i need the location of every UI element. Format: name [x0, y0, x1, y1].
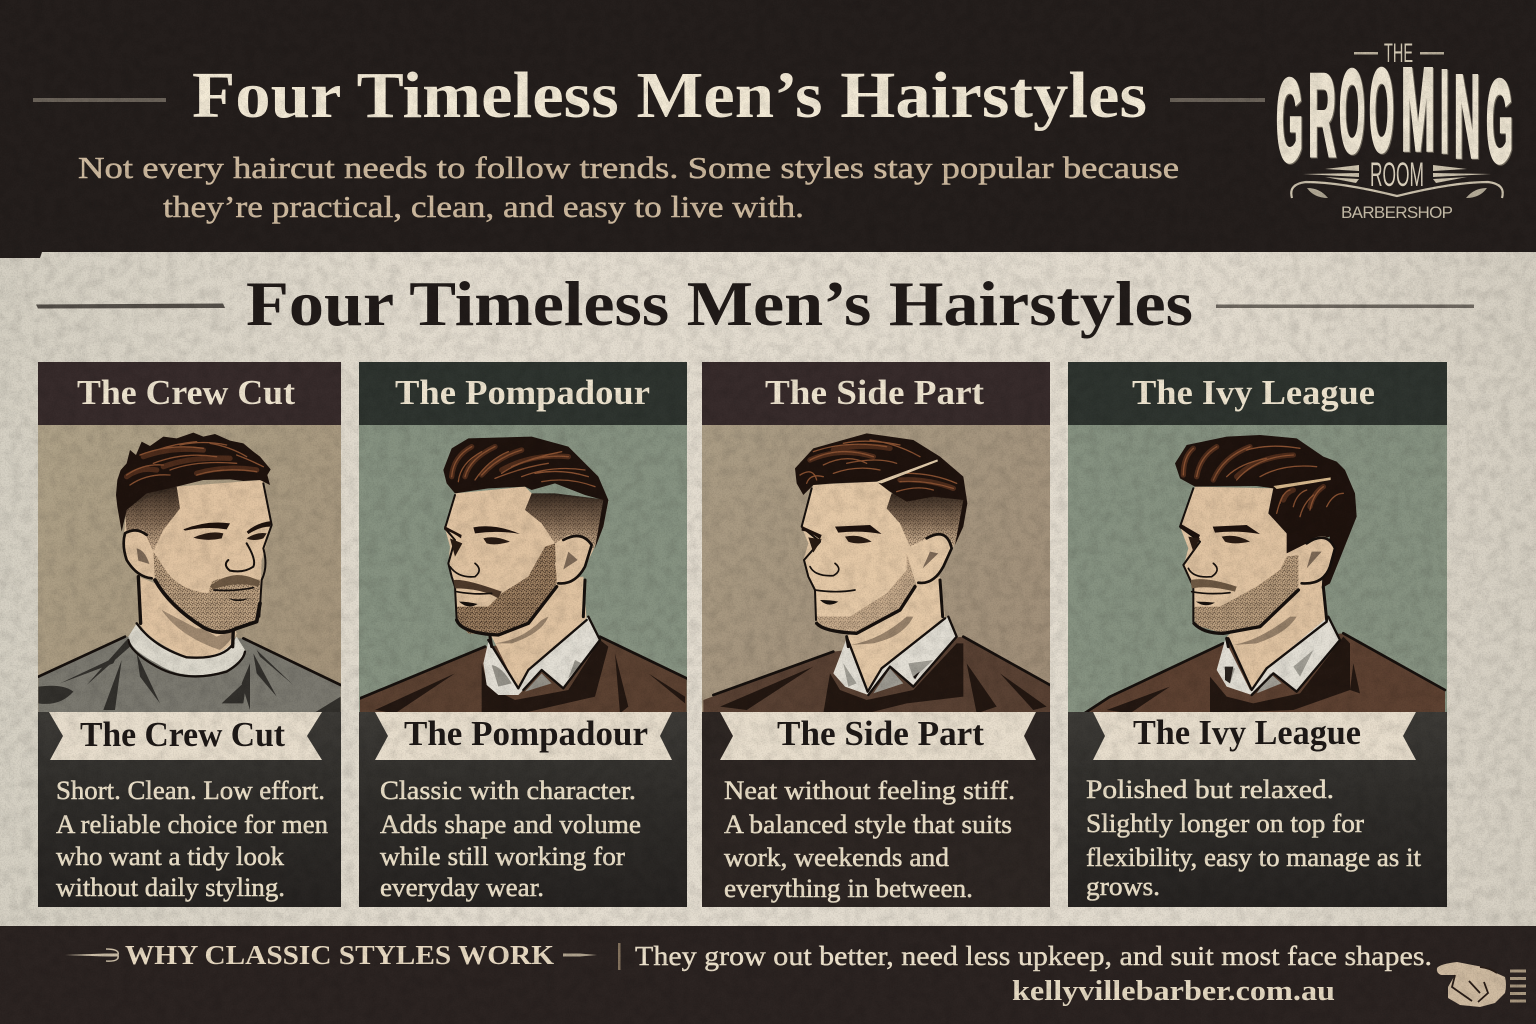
panel 3 description [724, 776, 1015, 903]
panel 4 name ribbon: The Ivy League [1133, 713, 1361, 752]
intro text: Not every haircut needs to follow trends. Some styles stay popular because [78, 150, 1179, 185]
logo: The Grooming Room Barbershop: THE [1384, 38, 1413, 68]
panel 3 name ribbon [720, 712, 1036, 760]
logo wordmark: M [1401, 44, 1435, 176]
panel 3 header [702, 362, 1050, 425]
panel 1 name ribbon: The Crew Cut [80, 715, 285, 754]
main title: Four Timeless Men’s Hairstyles [192, 59, 1147, 132]
panel 4 header: The Ivy League [1132, 373, 1375, 412]
logo wordmark: I [1440, 46, 1449, 178]
panel 3 description: Neat without feeling stiff. [724, 776, 1015, 805]
portrait: ivy league [1077, 435, 1445, 720]
panel 3 description: everything in between. [724, 874, 973, 903]
panel 1 description: without daily styling. [56, 873, 285, 902]
panel 1 header [38, 362, 341, 425]
panel 1 description: Short. Clean. Low effort. [56, 776, 325, 805]
panel 4 description: Polished but relaxed. [1086, 775, 1334, 804]
footer heading: WHY CLASSIC STYLES WORK [125, 940, 554, 970]
panel 1 name ribbon [49, 712, 322, 760]
panel 2 name ribbon: The Pompadour [404, 714, 648, 753]
portrait: side part [703, 433, 1050, 720]
panel 2 description: Adds shape and volume [380, 810, 641, 839]
logo wordmark [1276, 44, 1513, 188]
panel 3 description: A balanced style that suits [724, 810, 1012, 839]
logo wordmark: O [1369, 45, 1394, 177]
panel 4 name ribbon [1093, 712, 1416, 760]
logo: The Grooming Room Barbershop: ROOM [1370, 156, 1424, 194]
panel 3 name ribbon: The Side Part [777, 714, 984, 753]
panel 4 description [1086, 775, 1422, 901]
panel 2 header: The Pompadour [395, 373, 650, 412]
panel: The Crew Cut [38, 362, 341, 907]
panel 4 description: Slightly longer on top for [1086, 809, 1364, 838]
intro text [78, 150, 1179, 224]
intro text: they’re practical, clean, and easy to live with. [163, 189, 804, 224]
panel 1 description: A reliable choice for men [56, 810, 328, 839]
portrait: pompadour [360, 437, 687, 720]
panel 1 description: who want a tidy look [56, 842, 284, 871]
panel: The Side Part [702, 362, 1050, 907]
website: kellyvillebarber.com.au [1012, 976, 1335, 1007]
panel 1 description [56, 776, 328, 902]
footer message: They grow out better, need less upkeep, and suit most face shapes. [635, 941, 1432, 971]
portrait: crew cut [38, 433, 341, 720]
header band [0, 0, 1536, 258]
section title: Four Timeless Men’s Hairstyles [246, 268, 1193, 339]
panel 2 description: Classic with character. [380, 776, 636, 805]
panel 4 description: grows. [1086, 872, 1160, 901]
panel 2 name ribbon [375, 712, 672, 760]
footer band [0, 926, 1536, 1024]
panel: The Ivy League [1068, 362, 1447, 907]
panel 3 header: The Side Part [765, 373, 984, 412]
panel 2 description: everyday wear. [380, 873, 544, 902]
panel: The Pompadour [359, 362, 687, 907]
panel 4 description: flexibility, easy to manage as it [1086, 843, 1422, 872]
logo: The Grooming Room Barbershop: BARBERSHOP [1341, 203, 1453, 222]
icon: pointing hand [1437, 962, 1526, 1007]
logo wordmark: O [1339, 46, 1365, 178]
panel 1 header: The Crew Cut [77, 373, 295, 412]
paper background [0, 240, 1536, 940]
logo wordmark: G [1276, 55, 1303, 187]
logo wordmark: R [1308, 50, 1336, 182]
section title [36, 268, 1474, 339]
panel 2 description: while still working for [380, 842, 625, 871]
panel 2 description [380, 776, 641, 902]
logo flourish [1291, 165, 1503, 198]
panel 2 header [359, 362, 687, 425]
logo: The Grooming Room Barbershop [1276, 38, 1513, 222]
panel 4 header [1068, 362, 1447, 425]
panel 3 description: work, weekends and [724, 843, 949, 872]
